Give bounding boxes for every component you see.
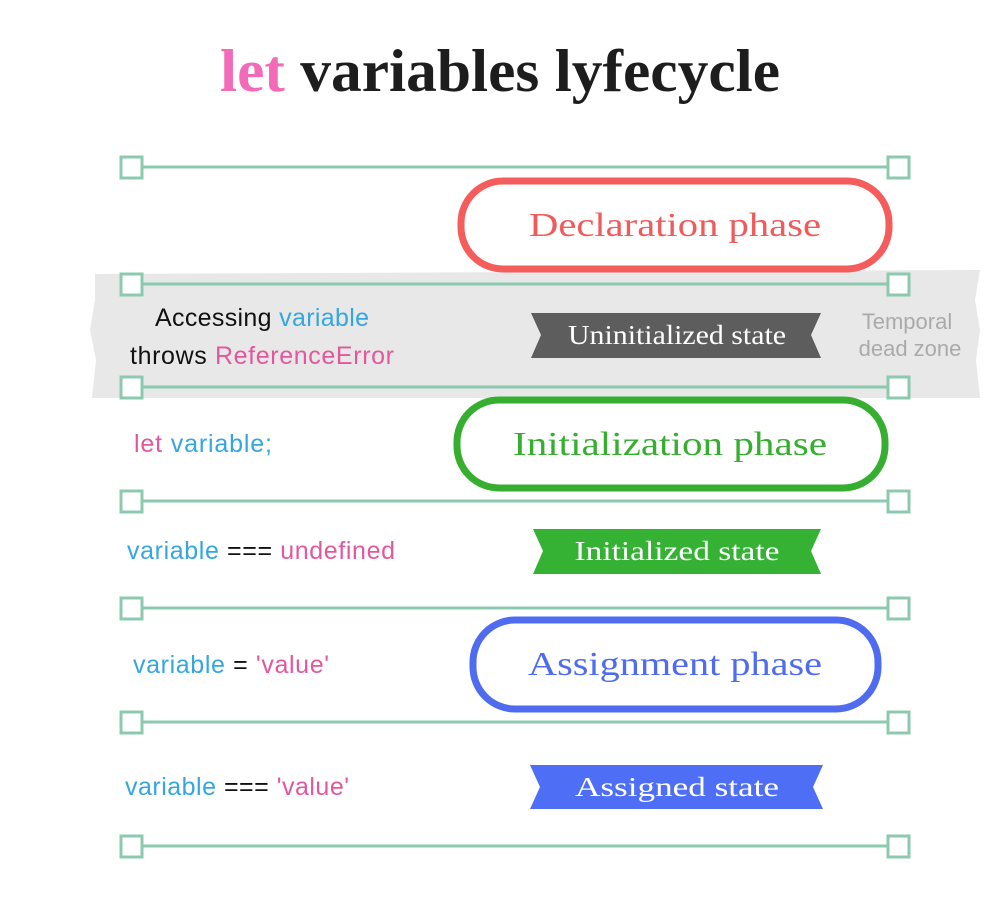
uninitialized state ribbon (531, 313, 821, 358)
text: accessing variable throws ReferenceError: Accessing variable (155, 304, 369, 332)
declaration phase pill (461, 181, 889, 269)
code: variable === undefined: variable === undefined (127, 537, 395, 565)
assigned state ribbon (530, 765, 823, 809)
code: variable === 'value': variable === 'value' (125, 773, 349, 801)
title: let variables lyfecycle (220, 38, 780, 104)
declaration phase pill: Declaration phase (529, 207, 821, 244)
initialized state ribbon: Initialized state (574, 536, 780, 566)
temporal dead zone label (859, 309, 961, 361)
panel: temporal dead zone band (90, 270, 980, 398)
text: accessing variable throws ReferenceError: throws ReferenceError (130, 342, 394, 370)
initialized state ribbon (533, 529, 821, 574)
code: variable = 'value': variable = 'value' (133, 651, 329, 679)
temporal dead zone label: Temporal (862, 309, 952, 334)
code: let variable;: let variable; (134, 430, 272, 458)
text: accessing variable throws ReferenceError (130, 304, 394, 370)
uninitialized state ribbon: Uninitialized state (568, 320, 786, 350)
temporal dead zone label: dead zone (859, 336, 961, 361)
initialization phase pill: Initialization phase (513, 426, 827, 463)
assignment phase pill (473, 620, 878, 709)
assigned state ribbon: Assigned state (575, 772, 779, 802)
timeline lines (121, 157, 909, 857)
assignment phase pill: Assignment phase (528, 646, 822, 683)
initialization phase pill (457, 400, 885, 488)
